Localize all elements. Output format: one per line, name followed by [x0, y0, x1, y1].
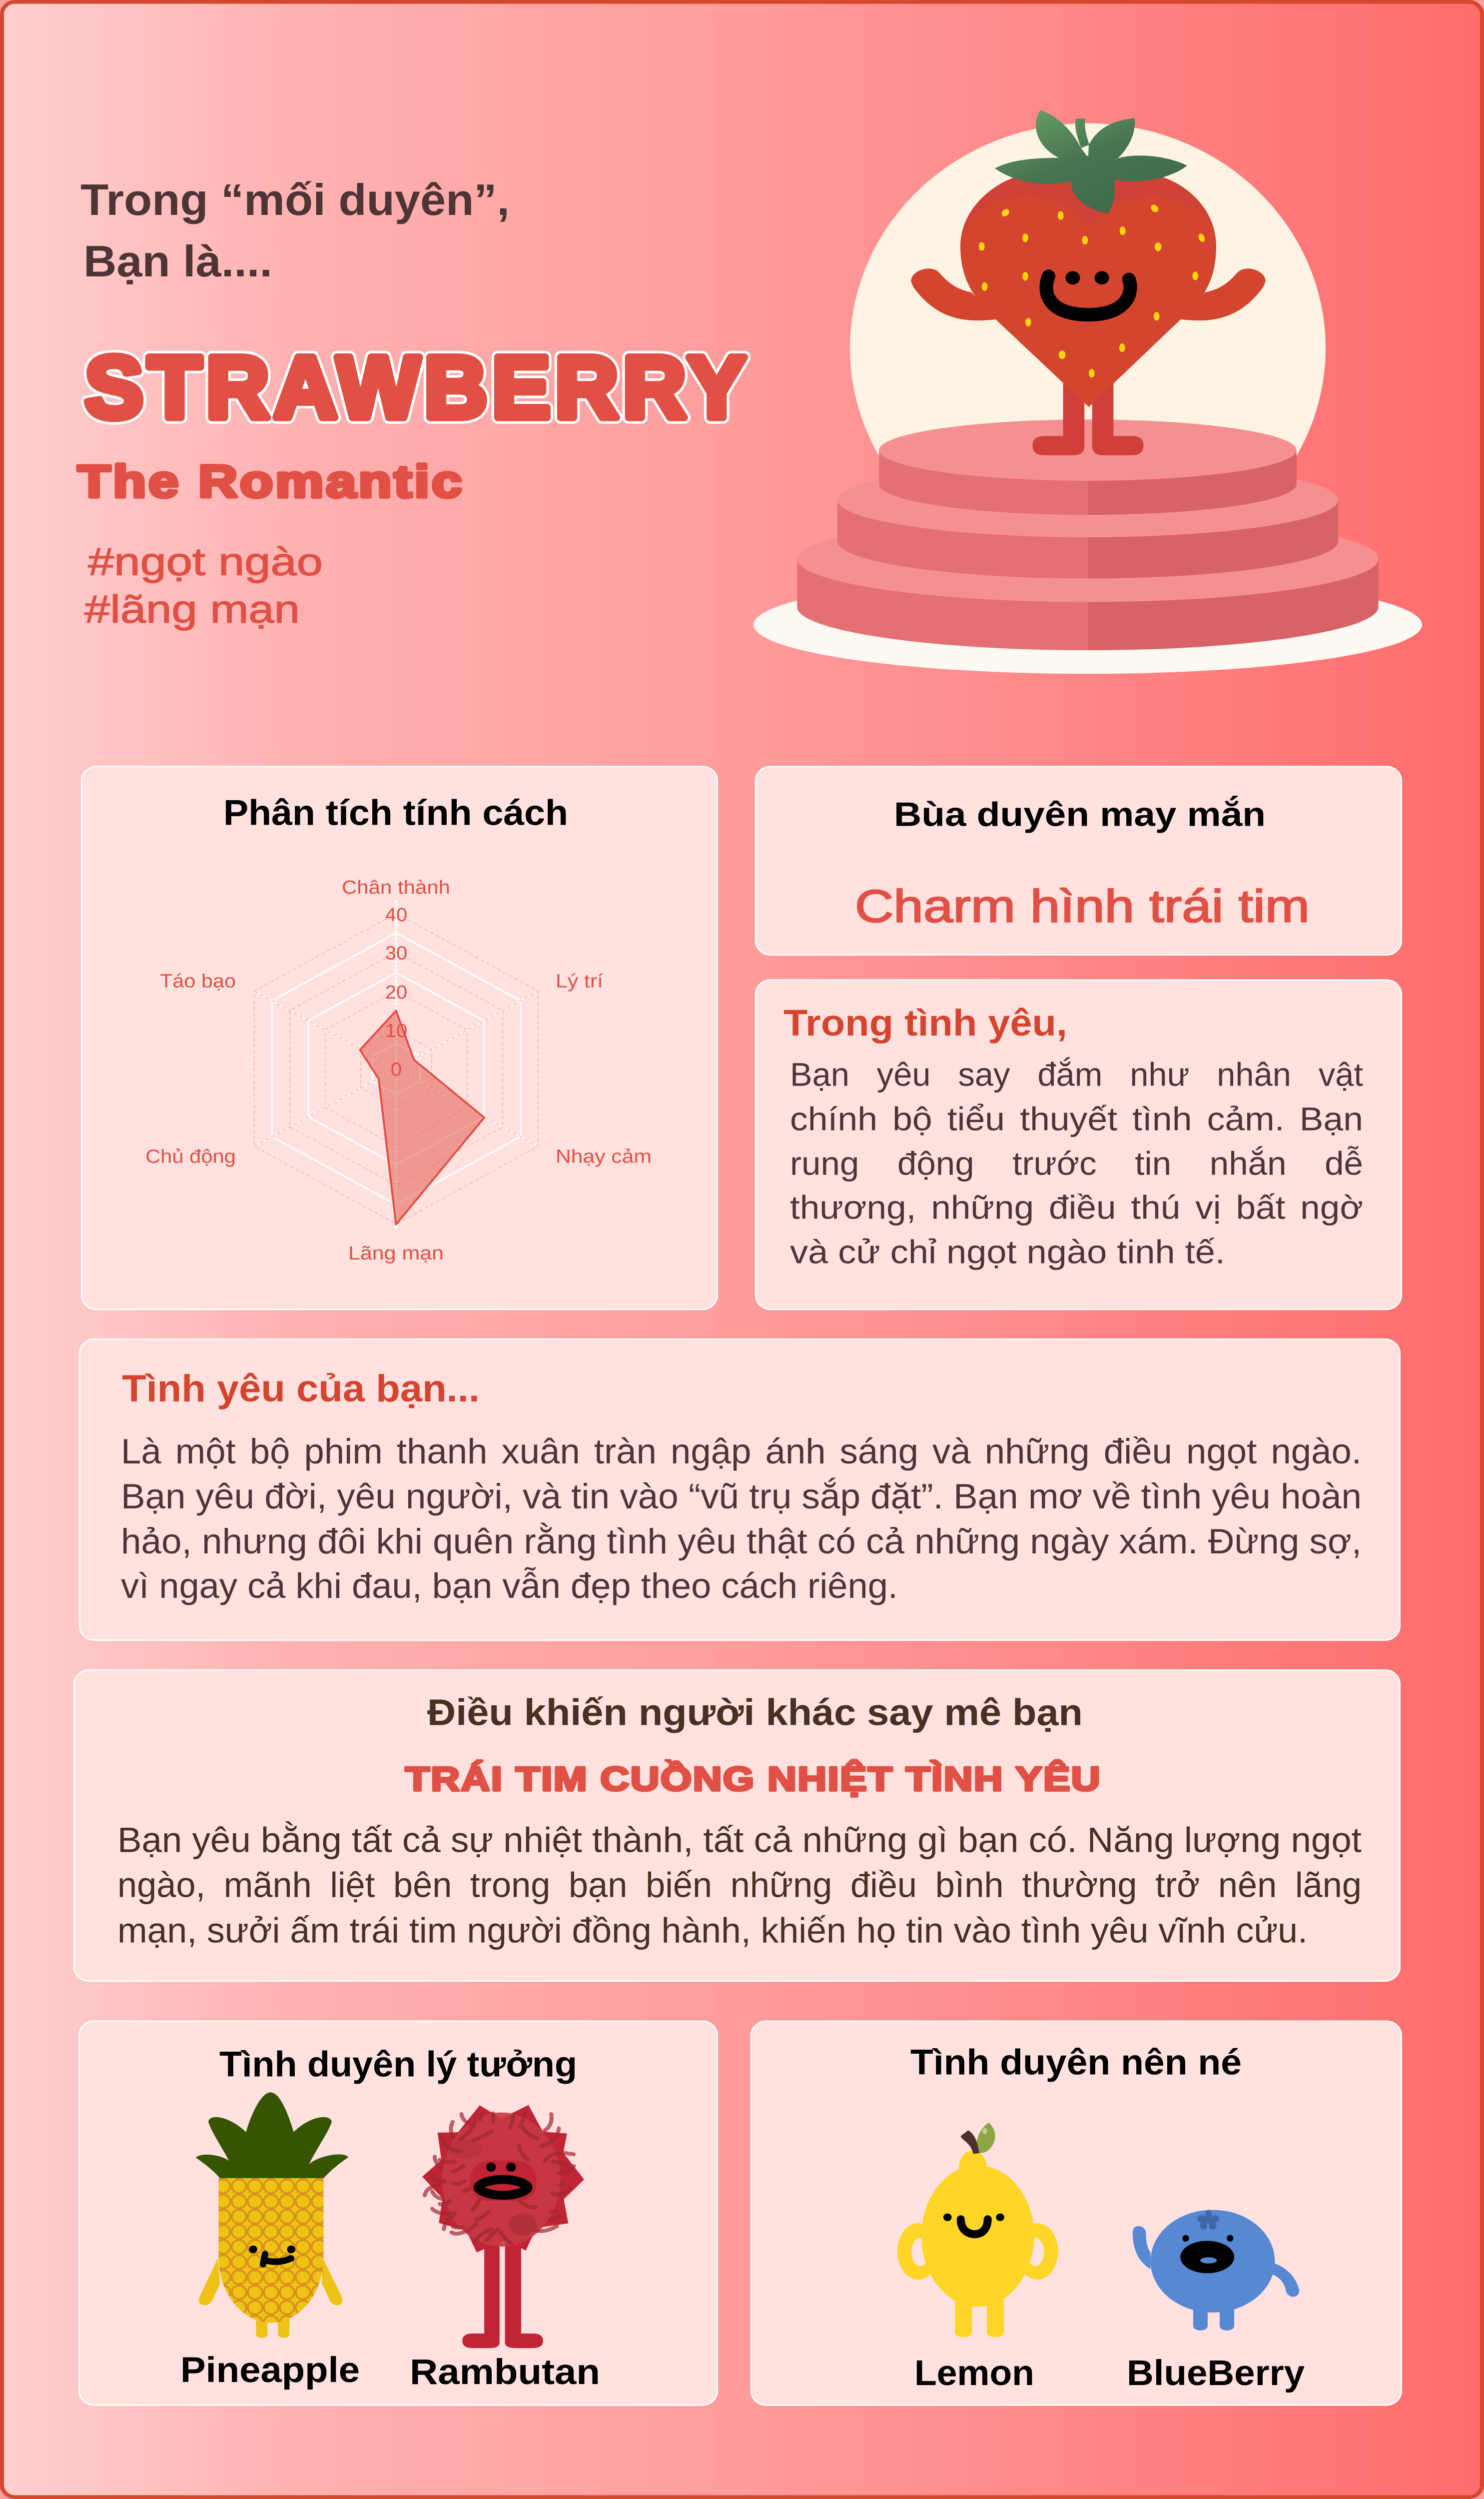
heading: Trong tình yêu,: [783, 1003, 1067, 1044]
title: STRAWBERRY: STRAWBERRY: [85, 339, 750, 436]
highlight title: TRÁI TIM CUỒNG NHIỆT TÌNH YÊU: [405, 1759, 1101, 1798]
pineapple body: [219, 2178, 324, 2323]
strawberry arms: [911, 268, 1266, 320]
radar axis labels: Lãng mạn: [348, 1243, 444, 1264]
rambutan label: Rambutan: [410, 2353, 600, 2392]
body text: [790, 1056, 1363, 1270]
blueberry body: [1151, 2210, 1275, 2313]
radar axis labels: Lý trí: [556, 971, 603, 992]
illustration: lemon: [897, 2123, 1058, 2338]
illustration: blueberry: [1133, 2210, 1299, 2331]
intro heading: Bạn là....: [83, 237, 272, 286]
illustration: pineapple: [196, 2092, 348, 2338]
blueberry flower: [1197, 2210, 1219, 2230]
illustration: strawberry on podium: [753, 110, 1422, 674]
radar axis labels: [145, 877, 652, 1264]
panel: your love: [80, 1339, 1400, 1640]
subtitle: The Romantic: The Romantic: [77, 456, 464, 507]
strawberry body: [960, 173, 1216, 407]
podium bottom tier: [797, 516, 1379, 650]
strawberry seeds: [979, 204, 1206, 377]
radar tick labels: 30: [385, 943, 407, 964]
panel: matches to avoid: [751, 2021, 1401, 2405]
panel: ideal matches: [79, 2021, 718, 2405]
radar tick labels: 20: [385, 982, 407, 1003]
body text: Bạn yêu đời, yêu người, và tin vào “vũ trụ sắp đặt”. Bạn mơ về tình yêu hoàn: [121, 1477, 1362, 1516]
pineapple limbs and crown: [196, 2092, 348, 2338]
panel: personality analysis: [82, 767, 718, 1309]
body text: [121, 1432, 1362, 1606]
body text: Bạn yêu bằng tất cả sự nhiệt thành, tất cả những gì bạn có. Năng lượng ngọt: [117, 1821, 1362, 1860]
radar chart: [145, 877, 652, 1264]
charm name: Charm hình trái tim: [855, 881, 1310, 932]
strawberry body highlight: [960, 196, 1216, 407]
body text: hảo, nhưng đôi khi quên rằng tình yêu thật có cả những ngày xám. Đừng sợ,: [121, 1522, 1362, 1561]
illustration: rambutan: [422, 2105, 584, 2348]
heading: Tình yêu của bạn...: [122, 1367, 480, 1410]
lemon face: [943, 2214, 1004, 2234]
lemon leaf and stem: [961, 2123, 995, 2154]
body text: thương, những điều thú vị bất ngờ: [790, 1189, 1363, 1226]
radar tick labels: 10: [385, 1021, 407, 1042]
rambutan face: [470, 2161, 537, 2201]
heading: Tình duyên lý tưởng: [219, 2045, 577, 2084]
panel: lucky charm: [755, 767, 1401, 955]
heading: Phân tích tính cách: [223, 793, 568, 833]
pineapple face: [249, 2246, 295, 2264]
blueberry label: BlueBerry: [1127, 2354, 1305, 2393]
body text: Là một bộ phim thanh xuân tràn ngập ánh sáng và những điều ngọt ngào.: [121, 1432, 1362, 1471]
radar axis labels: Chân thành: [342, 877, 450, 898]
body text: rung động trước tin nhắn dễ: [790, 1145, 1363, 1182]
podium middle tier: [837, 463, 1338, 578]
strawberry leaves: [995, 110, 1187, 214]
hashtags: #ngọt ngào: [88, 540, 323, 583]
lemon label: Lemon: [914, 2354, 1034, 2393]
intro heading: [80, 175, 510, 286]
body text: ngào, mãnh liệt bên trong bạn biến những điều bình thường trở nên lãng: [117, 1866, 1362, 1905]
pineapple label: Pineapple: [180, 2351, 360, 2390]
base plate: [753, 576, 1422, 674]
blueberry face: [1180, 2235, 1234, 2273]
title: STRAWBERRY: STRAWBERRY: [85, 339, 750, 436]
lemon legs: [955, 2289, 1004, 2338]
body text: và cử chỉ ngọt ngào tinh tế.: [790, 1234, 1225, 1270]
rambutan body: [422, 2105, 584, 2253]
body text: Bạn yêu say đắm như nhân vật: [790, 1056, 1363, 1093]
body text: mạn, sưởi ấm trái tim người đồng hành, khiến họ tin vào tình yêu vĩnh cửu.: [117, 1911, 1308, 1950]
rambutan legs: [462, 2237, 543, 2348]
body text: chính bộ tiểu thuyết tình cảm. Bạn: [790, 1101, 1363, 1138]
sun circle: [850, 123, 1326, 573]
heading: Tình duyên nên né: [910, 2043, 1242, 2082]
hashtags: #lãng mạn: [84, 587, 300, 631]
radar tick labels: [385, 905, 407, 1080]
lemon arms: [897, 2223, 1058, 2280]
strawberry face: [1046, 271, 1130, 315]
radar axis labels: Chủ động: [145, 1147, 236, 1167]
radar data polygon: [360, 1011, 484, 1225]
heading: Bùa duyên may mắn: [894, 795, 1266, 833]
radar axis labels: Nhạy cảm: [556, 1147, 652, 1167]
radar tick labels: 0: [391, 1059, 402, 1080]
lemon body: [921, 2151, 1034, 2307]
heading: Điều khiến người khác say mê bạn: [427, 1692, 1083, 1733]
podium top tier: [879, 419, 1297, 515]
blueberry limbs: [1133, 2226, 1299, 2331]
strawberry legs: [1033, 379, 1144, 455]
hashtags: [84, 540, 323, 631]
body text: vì ngay cả khi đau, bạn vẫn đẹp theo cách riêng.: [121, 1567, 898, 1606]
panel: in love: [755, 980, 1401, 1309]
radar axis labels: Táo bạo: [160, 971, 236, 992]
radar tick labels: 40: [385, 905, 407, 926]
body text: [117, 1821, 1362, 1950]
intro heading: Trong “mối duyên”,: [80, 175, 510, 224]
panel: what attracts others: [74, 1670, 1400, 1981]
